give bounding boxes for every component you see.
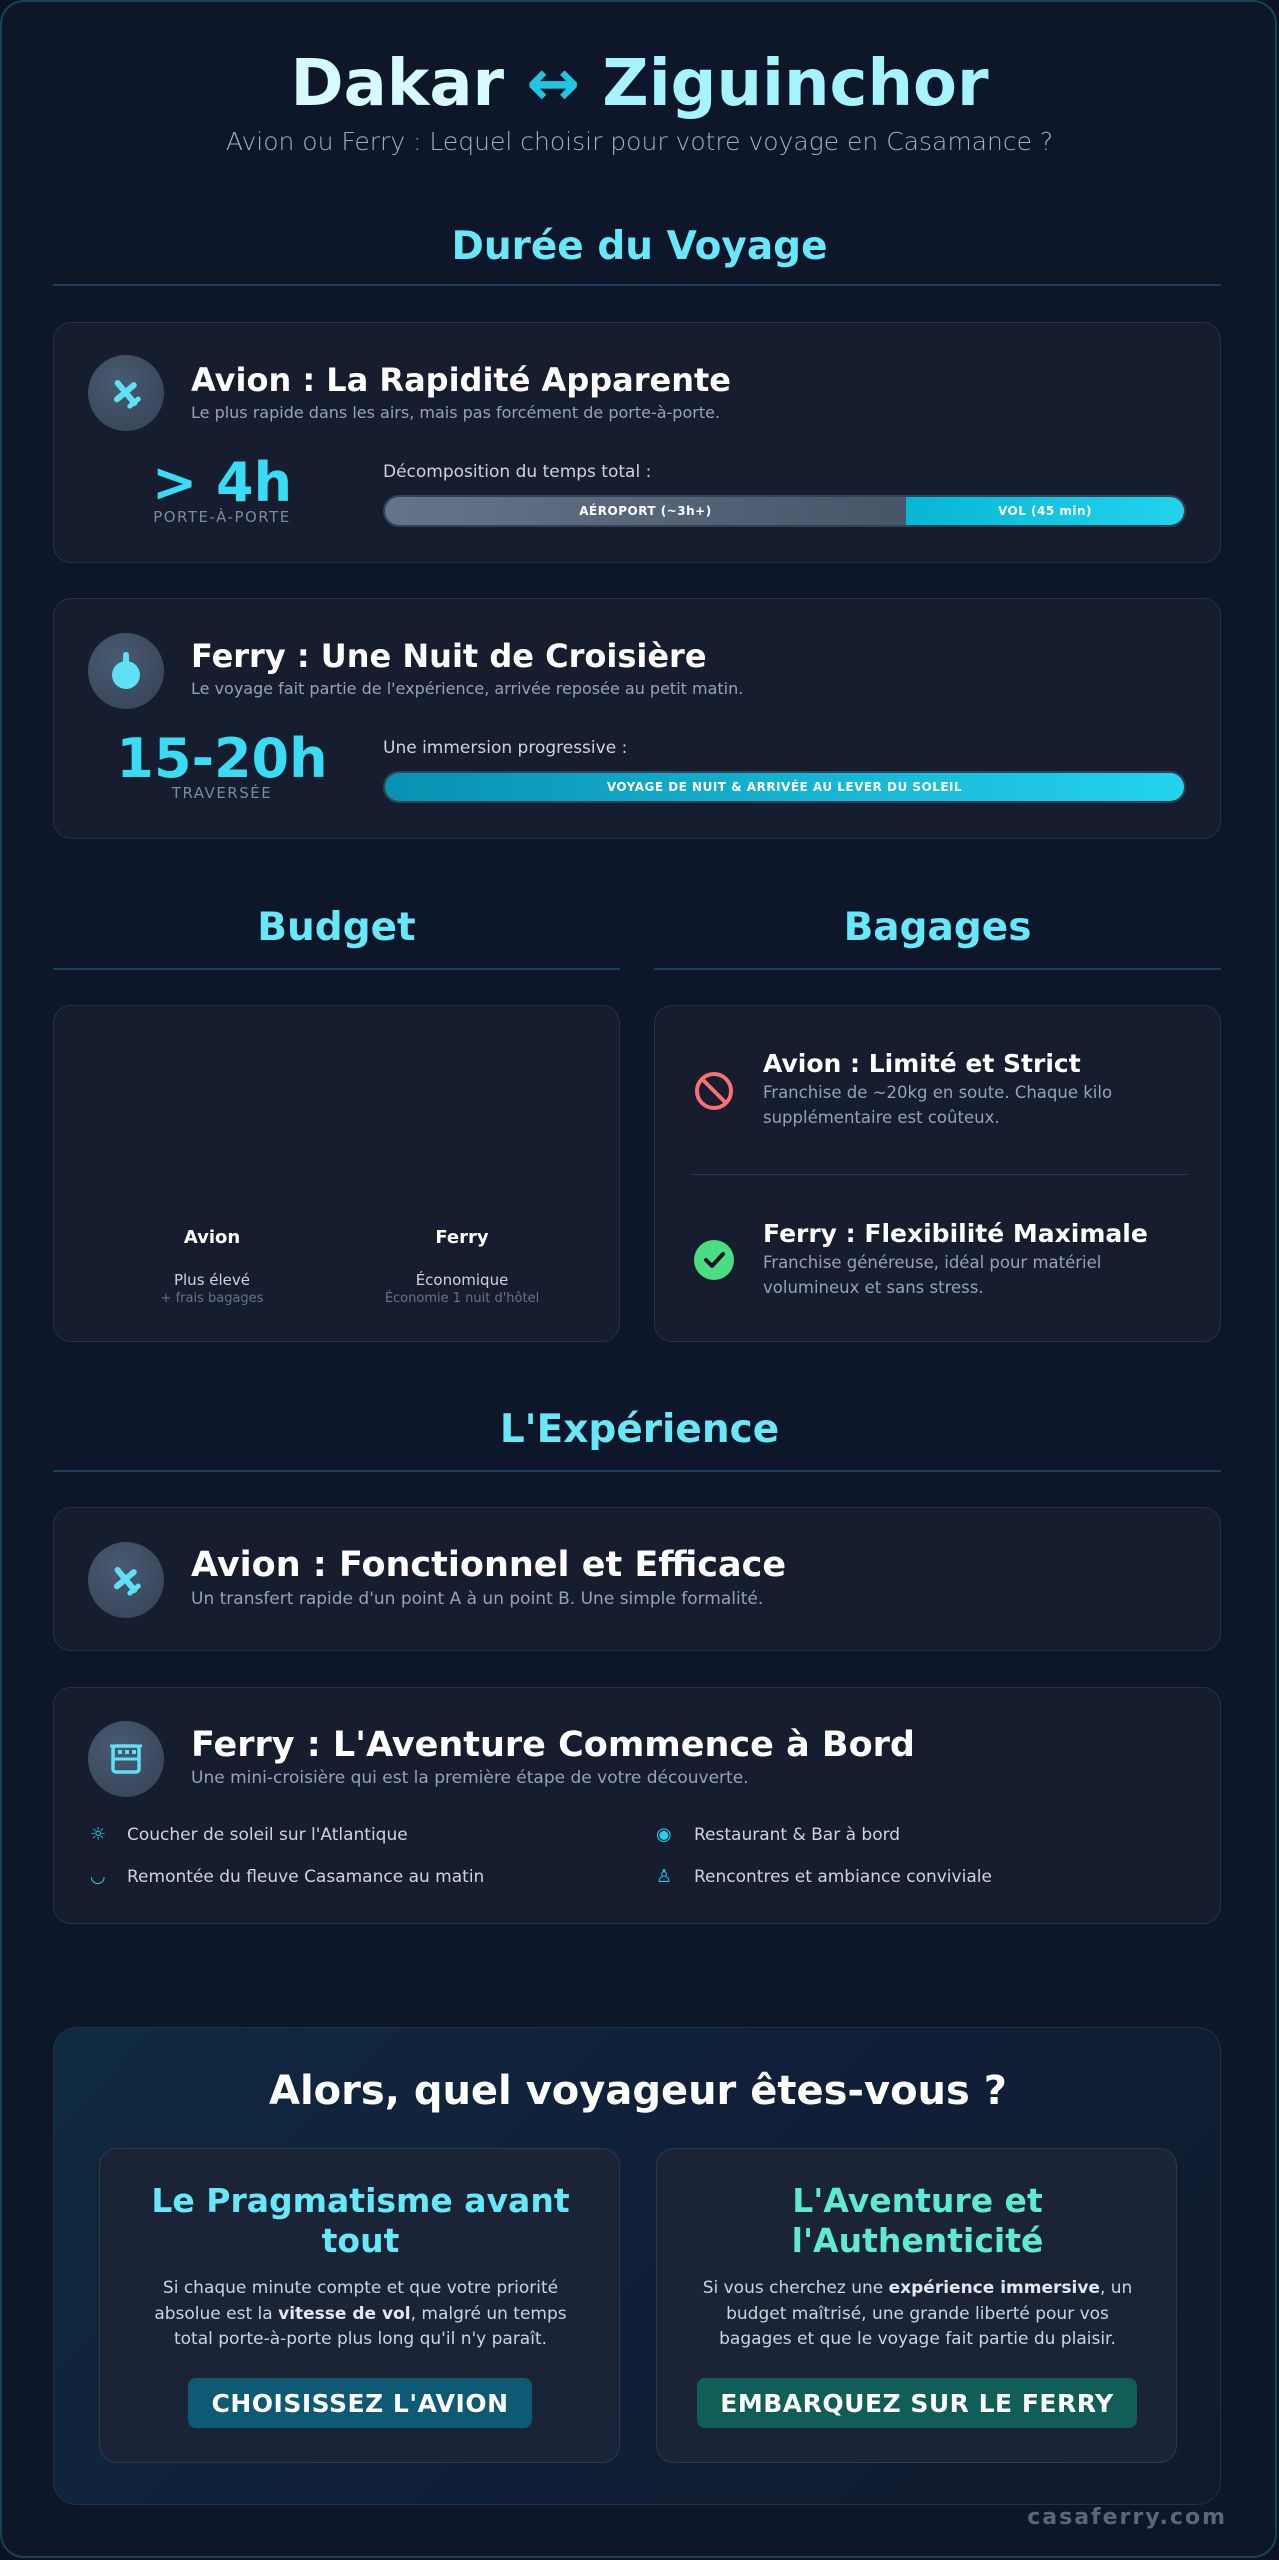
budget: avion: + frais bagages (161, 1291, 263, 1306)
panel: ferry duration (53, 598, 1221, 839)
budget: avion (161, 1227, 263, 1306)
heading: L'Expérience: L'Expérience (500, 1407, 779, 1452)
text: ferry bagages (763, 1219, 1148, 1297)
button: EMBARQUEZ SUR LE FERRY (720, 2388, 1114, 2418)
budget: ferry: Économique (416, 1271, 508, 1289)
bar: night voyage (383, 771, 1186, 803)
panel: budget (53, 1005, 620, 1342)
bar chart: time breakdown (383, 495, 1186, 527)
bar: night voyage: VOYAGE DE NUIT & ARRIVÉE AU LEVER DU SOLEIL (607, 780, 962, 794)
card title: Ferry : Une Nuit de Croisière (191, 637, 707, 675)
card: avion choice (99, 2148, 620, 2463)
heading (792, 2181, 1043, 2260)
heading: Budget: Budget (257, 905, 416, 950)
icon: ferry (88, 633, 164, 709)
item: river: Remontée du fleuve Casamance au matin (127, 1867, 484, 1887)
icon: ship (88, 1721, 164, 1797)
stat: 15-20h: 15-20h (116, 727, 328, 790)
heading: Bagages: Bagages (844, 905, 1031, 950)
panel: ferry experience (53, 1687, 1221, 1924)
card subtitle: Une mini-croisière qui est la première étape de votre découverte. (191, 1768, 749, 1788)
text: avion bagages: Avion : Limité et Strict (763, 1049, 1081, 1078)
panel: avion experience (53, 1507, 1221, 1651)
button: CHOISISSEZ L'AVION (212, 2388, 508, 2418)
card: ferry choice (656, 2148, 1177, 2463)
text: ferry bagages: Ferry : Flexibilité Maximale (763, 1219, 1148, 1248)
panel: avion duration: PORTE-À-PORTE (153, 508, 291, 526)
budget: avion: Plus élevé (174, 1271, 250, 1289)
item: restaurant: Restaurant & Bar à bord (694, 1825, 900, 1845)
button (188, 2378, 532, 2428)
stat: > 4h: > 4h (152, 451, 292, 514)
conclusion heading: Alors, quel voyageur êtes-vous ? (269, 2068, 1007, 2114)
card subtitle: Le voyage fait partie de l'expérience, arrivée reposée au petit matin. (191, 679, 743, 698)
item: sunset: Coucher de soleil sur l'Atlantique (127, 1825, 408, 1845)
panel: conclusion (53, 2027, 1221, 2505)
heading: Le Pragmatisme avant tout (151, 2181, 570, 2260)
label: Décomposition du temps total : (383, 462, 651, 482)
item: meetings: ♙ (656, 1866, 672, 1887)
budget: ferry: Économie 1 nuit d'hôtel (385, 1291, 539, 1306)
item: meetings: Rencontres et ambiance conviviale (694, 1867, 992, 1887)
bar chart: time breakdown: VOL (45 min) (998, 504, 1092, 518)
bar chart: time breakdown: AÉROPORT (~3h+) (579, 504, 712, 518)
footer: brand: casaferry.com (1027, 2505, 1227, 2530)
icon: check (694, 1240, 734, 1280)
item: sunset: ☼ (90, 1824, 106, 1845)
budget: ferry (385, 1227, 539, 1306)
card title: Avion : La Rapidité Apparente (191, 361, 731, 399)
list: ferry perks (90, 1824, 992, 1887)
icon: forbidden (695, 1072, 733, 1110)
card title: Avion : Fonctionnel et Efficace (191, 1545, 786, 1585)
card subtitle: Le plus rapide dans les airs, mais pas forcément de porte-à-porte. (191, 403, 720, 422)
heading: L'Aventure et (792, 2181, 1043, 2220)
text: avion bagages: Franchise de ~20kg en soute. Chaque kilo supplémentaire est coûteux. (763, 1083, 1112, 1127)
budget: ferry: Ferry (435, 1227, 489, 1248)
icon: plane (88, 355, 164, 431)
label: Une immersion progressive : (383, 738, 627, 758)
heading: l'Authenticité (792, 2221, 1043, 2260)
body: Si chaque minute compte et que votre priorité absolue est la vitesse de vol, malgré un temps total porte-à-porte plus long qu'il n'y paraît. (154, 2278, 567, 2349)
text: ferry bagages: Franchise généreuse, idéal pour matériel volumineux et sans stress. (763, 1253, 1101, 1297)
panel: ferry duration: TRAVERSÉE (172, 784, 272, 802)
title: Dakar ↔ Ziguinchor (290, 47, 989, 121)
subtitle: Avion ou Ferry : Lequel choisir pour votre voyage en Casamance ? (226, 127, 1053, 156)
item: restaurant: ◉ (656, 1824, 672, 1845)
card subtitle: Un transfert rapide d'un point A à un point B. Une simple formalité. (191, 1589, 763, 1609)
heading: Durée du Voyage: Durée du Voyage (451, 224, 828, 269)
item: river: ◡ (90, 1866, 106, 1887)
card title: Ferry : L'Aventure Commence à Bord (191, 1725, 915, 1765)
button (697, 2378, 1137, 2428)
body: Si vous cherchez une expérience immersive, un budget maîtrisé, une grande liberté pour vos bagages et que le voyage fait partie du plaisir. (703, 2278, 1132, 2349)
icon: plane (88, 1542, 164, 1618)
budget: avion: Avion (184, 1227, 240, 1248)
text: avion bagages (763, 1049, 1112, 1127)
panel: bagages (654, 1005, 1221, 1342)
panel: avion duration (53, 322, 1221, 563)
